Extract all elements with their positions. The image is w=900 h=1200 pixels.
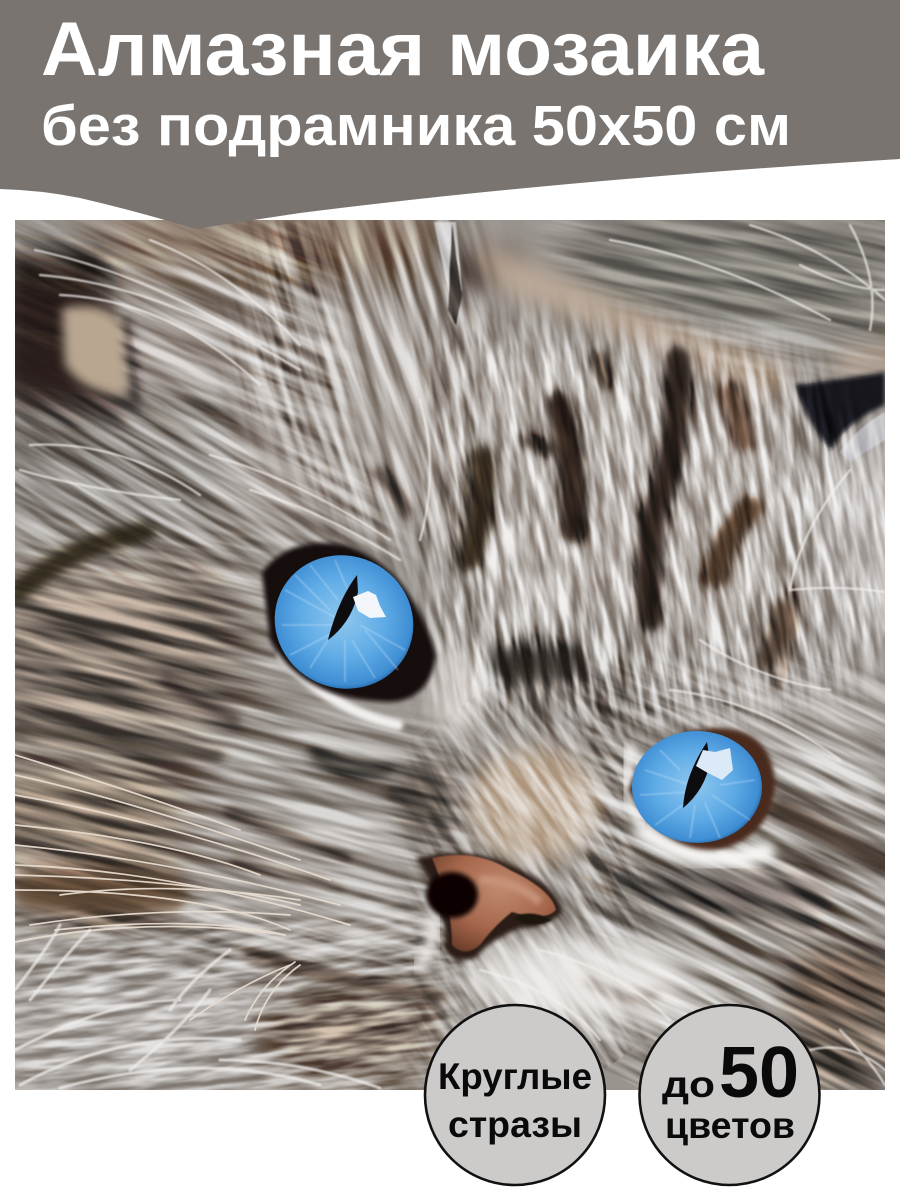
- stripes and markings: [15, 320, 885, 996]
- reinforced dark markings over fur: [15, 310, 885, 995]
- badge: up to 50 colours: [640, 1005, 820, 1185]
- left eye: [253, 533, 436, 711]
- large fur colour masses: [0, 205, 900, 1090]
- whiskers: [15, 755, 350, 1030]
- light fur strands: [20, 225, 885, 1085]
- header band: [0, 0, 900, 229]
- badge: round rhinestones: [425, 1005, 605, 1185]
- badge: up to 50 colours: цветов: [665, 1105, 795, 1146]
- soft white muzzle: [465, 937, 675, 1013]
- badge: up to 50 colours: до: [662, 1064, 715, 1105]
- badge: up to 50 colours: 50: [719, 1033, 799, 1113]
- subtitle: без подрамника 50х50 см: [41, 94, 791, 158]
- wispy bottom-left strands: [15, 925, 380, 1088]
- cat photo: [15, 220, 885, 1090]
- ear and dark corner: [5, 250, 105, 400]
- band shape: [0, 0, 900, 229]
- badge: round rhinestones: Круглые: [438, 1056, 592, 1097]
- white fur under eyes: [282, 655, 870, 965]
- right eye: [628, 728, 775, 850]
- nose: [416, 853, 562, 960]
- title: Алмазная мозаика: [41, 7, 765, 92]
- black ear gap: [795, 372, 885, 450]
- iris fibres: [282, 560, 405, 682]
- badge: round rhinestones: стразы: [448, 1104, 582, 1145]
- directional fur texture: [15, 220, 355, 444]
- muzzle and cheek tones: [469, 747, 601, 863]
- tan ear: [62, 306, 128, 395]
